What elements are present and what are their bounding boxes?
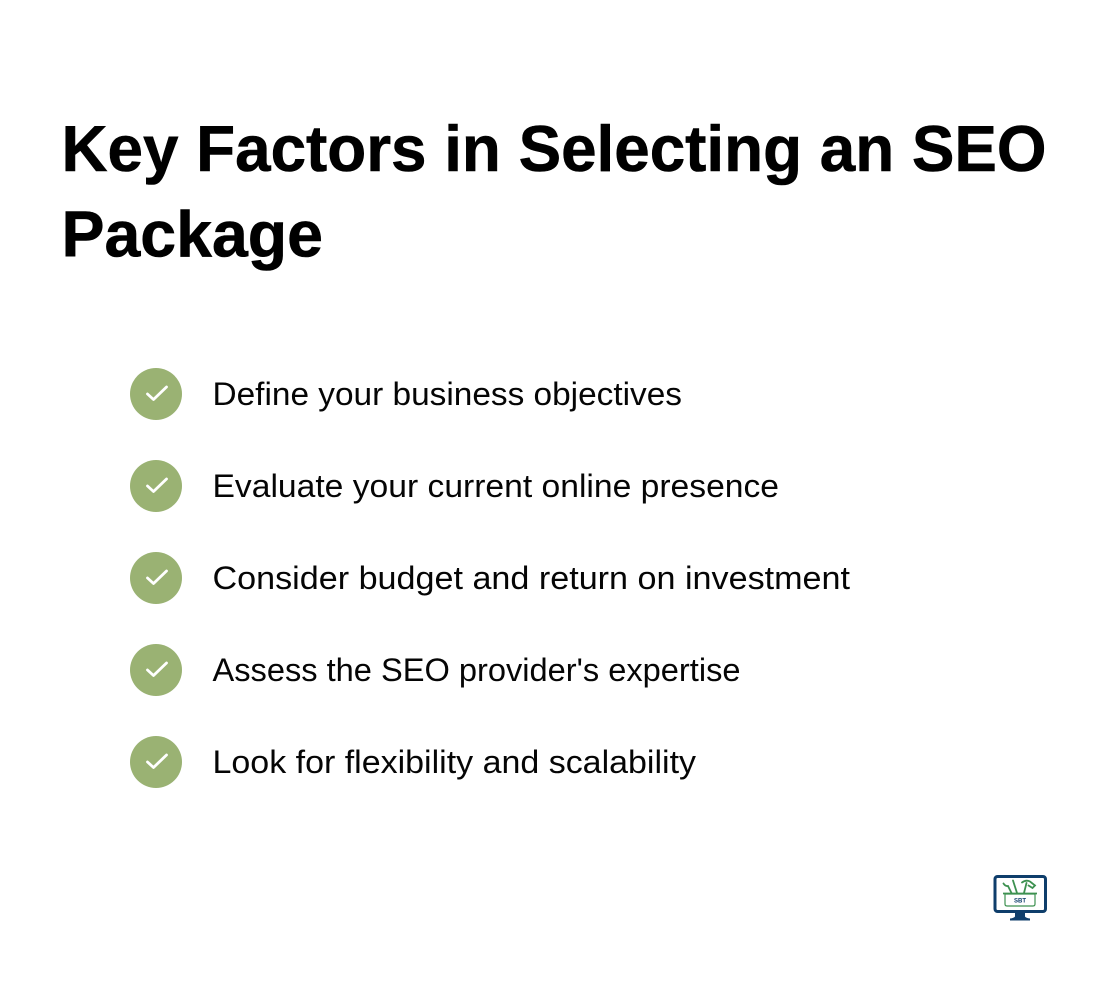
item: budget and ROI: Consider budget and return on investment <box>212 560 850 596</box>
checklist <box>130 368 850 788</box>
item: budget and ROI <box>130 552 850 604</box>
item: provider expertise: Assess the SEO provider's expertise <box>212 652 740 688</box>
item: flexibility <box>130 736 696 788</box>
icon: SBT toolbox monitor logo: SBT <box>1014 898 1026 904</box>
item: provider expertise <box>130 644 740 696</box>
icon: SBT toolbox monitor logo <box>995 876 1046 920</box>
item: evaluate presence <box>130 460 779 512</box>
title <box>62 112 1046 270</box>
title: Key Factors in Selecting an SEO <box>62 112 1046 185</box>
item: define objectives: Define your business objectives <box>212 376 682 412</box>
title: Package <box>62 198 323 270</box>
item: define objectives <box>130 368 682 420</box>
item: evaluate presence: Evaluate your current online presence <box>212 468 779 504</box>
item: flexibility: Look for flexibility and scalability <box>212 744 696 780</box>
